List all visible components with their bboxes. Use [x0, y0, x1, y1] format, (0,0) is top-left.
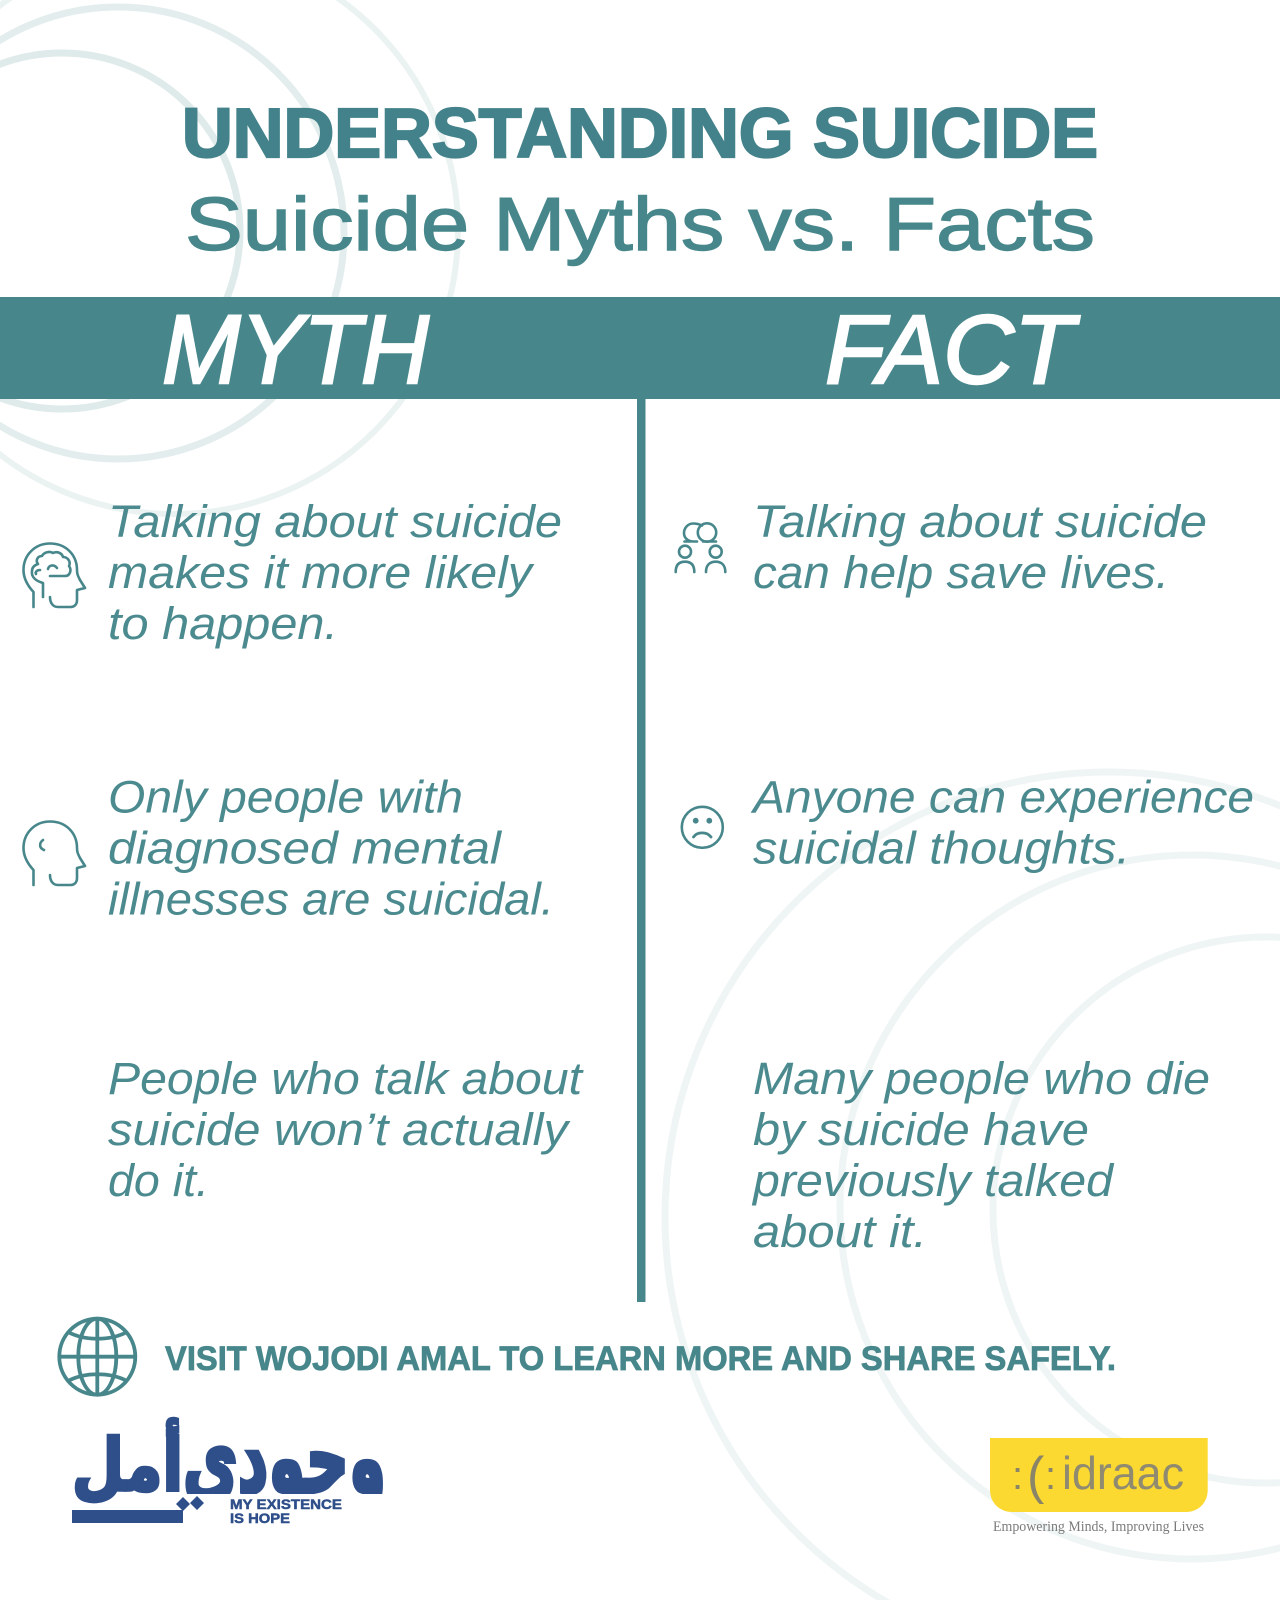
header band [0, 297, 1280, 399]
fact 1 text: can help save lives. [753, 547, 1169, 598]
title: UNDERSTANDING SUICIDE [182, 94, 1098, 172]
fact 2 text: Anyone can experience [750, 772, 1254, 822]
fact 3 text: Many people who die [753, 1053, 1210, 1104]
myth 1 text: to happen. [108, 598, 338, 649]
icon: sad face [682, 807, 723, 848]
call to action: VISIT WOJODI AMAL TO LEARN MORE AND SHARE SAFELY. [165, 1340, 1116, 1378]
column heading: myth: MYTH [162, 295, 430, 404]
subtitle: Suicide Myths vs. Facts [185, 182, 1095, 266]
logo: wojodi amal: IS HOPE [230, 1510, 290, 1526]
logo: idraac: idraac [1062, 1447, 1184, 1499]
myth 2 text: Only people with [108, 772, 463, 822]
fact 3 text: by suicide have [753, 1104, 1089, 1155]
myth 1 text: Talking about suicide [108, 496, 562, 547]
logo: wojodi amal: MY EXISTENCE [230, 1496, 342, 1512]
fact 3 text: previously talked [751, 1155, 1115, 1206]
myth 2 text: diagnosed mental [108, 822, 503, 874]
myth 3 text: People who talk about [108, 1053, 585, 1104]
myth 3 text: do it. [108, 1155, 209, 1206]
logo: idraac: : [1045, 1454, 1056, 1498]
fact 1 text: Talking about suicide [753, 496, 1207, 547]
icon: two people talking [676, 523, 725, 572]
logo: wojodi amal: وجودي [183, 1403, 386, 1516]
logo: wojodi amal [72, 1416, 383, 1524]
column heading: fact: FACT [825, 295, 1080, 404]
logo: idraac: Empowering Minds, Improving Lives [993, 1519, 1204, 1535]
myth 3 text: suicide won’t actually [108, 1104, 571, 1155]
logo: idraac: : [1012, 1454, 1023, 1498]
logo: wojodi amal: أمل [72, 1418, 183, 1507]
icon: head with brain [24, 544, 85, 607]
myth 1 text: makes it more likely [108, 547, 535, 598]
center divider [637, 399, 646, 1302]
logo: idraac [990, 1438, 1208, 1535]
logo: idraac: ( [1027, 1447, 1045, 1505]
icon: head outline [24, 822, 85, 885]
icon: globe [59, 1319, 135, 1395]
fact 2 text: suicidal thoughts. [753, 822, 1130, 874]
myth 2 text: illnesses are suicidal. [108, 874, 554, 924]
fact 3 text: about it. [753, 1206, 927, 1257]
